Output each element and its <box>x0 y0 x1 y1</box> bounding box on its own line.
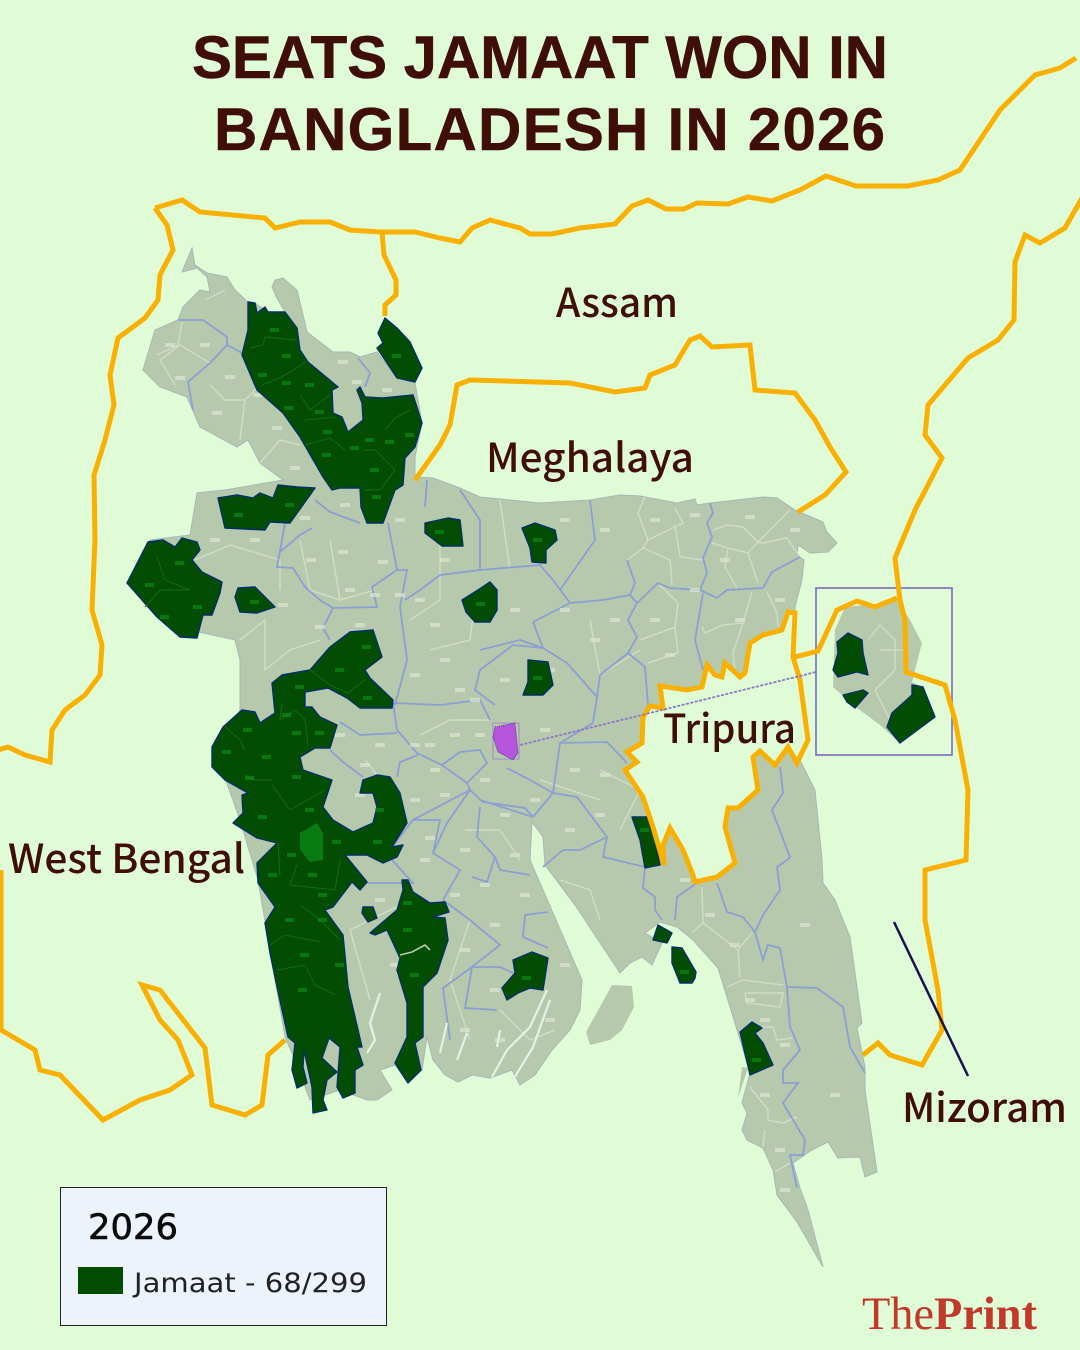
map: Bangladesh constituencies <box>127 248 877 1267</box>
legend entry: Jamaat - 68/299 <box>132 1268 367 1299</box>
inset: highlighted Dhaka area with connector <box>493 588 952 760</box>
West Bengal north border <box>0 208 173 762</box>
Assam northern border <box>155 58 1076 242</box>
legend swatch <box>78 1267 123 1294</box>
legend <box>60 1188 386 1326</box>
label: Assam: Assam <box>556 271 678 329</box>
seats won: north-west cluster <box>127 485 315 638</box>
seats won: south-west cluster <box>212 630 449 1113</box>
title: BANGLADESH IN 2026 <box>214 96 885 163</box>
arrow: Mizoram leader line <box>894 922 968 1076</box>
lighter seat patch <box>300 823 323 862</box>
label: Meghalaya: Meghalaya <box>486 426 694 484</box>
legend year: 2026 <box>88 1208 178 1248</box>
river channels <box>367 993 380 1053</box>
title: SEATS JAMAAT WON IN <box>192 24 888 91</box>
islands <box>586 985 748 1098</box>
Tripura north spur <box>795 598 897 657</box>
landmass <box>130 248 877 1267</box>
state border: Tripura <box>625 612 808 882</box>
label: West Bengal: West Bengal <box>8 827 245 885</box>
inset land <box>833 600 935 743</box>
title <box>192 24 888 163</box>
seats won: north cluster <box>242 302 422 523</box>
seats won: central scattered <box>425 518 557 695</box>
Meghalaya border <box>415 336 846 512</box>
label: Tripura: Tripura <box>663 697 796 755</box>
seats won: south and south-east <box>502 817 773 1075</box>
West Bengal south border <box>1 870 285 1120</box>
state borders: orange lines <box>0 58 1080 1120</box>
logo: ThePrint: ThePrint <box>862 1288 1037 1340</box>
highlighted seat <box>493 723 519 759</box>
Assam branch <box>382 232 396 316</box>
constituency number marks <box>165 345 840 1190</box>
label: Mizoram: Mizoram <box>902 1076 1067 1134</box>
inset frame <box>816 588 952 755</box>
district borders <box>157 290 865 1188</box>
inset connector line <box>520 672 816 745</box>
seat number marks on won seats <box>145 330 761 1060</box>
Assam eastern border <box>863 198 1080 1065</box>
